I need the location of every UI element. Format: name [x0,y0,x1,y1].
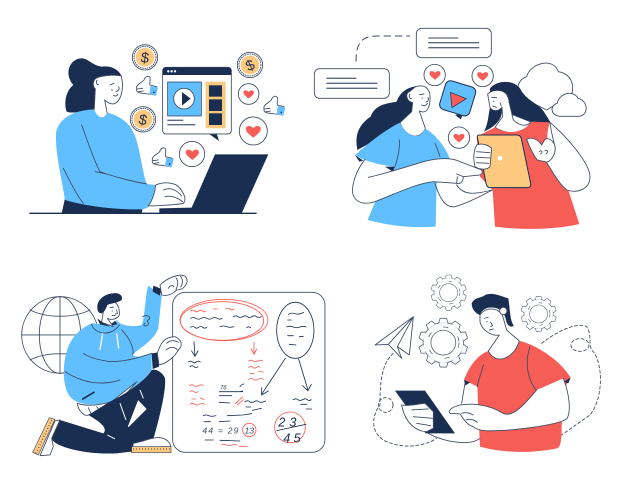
collar [97,318,117,327]
red text scribbles [189,360,263,405]
right woman hair [484,82,551,132]
far arm [462,383,465,403]
drawstrings [100,333,119,350]
icon: medium heart badge [179,141,205,167]
dark circled note [277,302,314,358]
icon: thumbs up three [152,148,174,167]
chat bubble left [314,69,389,98]
panel: man with tablet and gears [374,275,600,452]
right woman hand [527,138,555,162]
fraction circle [275,412,306,445]
upper hand [160,275,187,295]
icon: paper plane [375,317,413,358]
equation: 44 = 29 [202,425,240,435]
left woman t-shirt folds [395,140,440,167]
left woman lower arm [435,183,492,207]
small note with number: 76 [220,386,227,392]
red arrow [251,342,257,354]
hoodie drawstrings and folds [65,324,152,383]
trouser highlight [107,390,146,439]
sleeve cuffs [464,378,571,386]
icon: coin top left: $ [140,50,150,67]
left shoe [33,418,60,456]
right woman face [488,90,532,133]
equation result circle: 13 [244,425,254,435]
sweater fold lines [63,125,147,203]
sleeve squiggle [143,316,150,326]
panel: woman with laptop and video content [29,45,285,213]
globe [22,297,98,373]
icon: coin top left [132,45,158,70]
woman face and neck [93,75,122,118]
icon: thumbs up two [264,96,285,116]
cuff lower [152,352,159,369]
icon: large heart badge [239,117,267,145]
panel: man with whiteboard [22,275,325,456]
woman hair [65,58,122,113]
tablet camera dot [498,156,502,161]
trousers [52,370,165,454]
hand on tablet [402,403,433,432]
icon: small heart badge [238,84,259,104]
chat bubble top [416,28,491,58]
heart badge right [472,65,493,87]
typing hand [148,183,185,206]
head [102,300,119,327]
right woman dress [477,122,579,229]
hair [97,293,122,313]
icon: coin top right [237,52,263,78]
fraction circle: 45 [283,431,304,445]
face features [96,80,119,96]
icon: gear right [521,296,556,332]
icon: coin top right: $ [243,57,258,75]
trousers [62,198,143,213]
icon: coin middle [130,107,156,132]
t-shirt [464,341,571,452]
forearm line [428,433,480,443]
cuff upper [153,286,162,296]
ear [500,307,507,315]
clouds [518,63,586,116]
dark text scribbles [188,361,312,441]
dashed connector [356,36,410,62]
dashed path left [374,353,437,446]
left woman face and neck [400,86,430,136]
dashed path right [542,325,600,435]
face features [110,307,117,316]
heart badge bottom [448,127,470,148]
t-shirt folds [477,347,537,391]
icon: gear top [431,275,466,310]
hoodie pocket [83,392,94,399]
neck and face [480,309,519,359]
arrows [192,342,311,395]
icon: gear large [419,318,468,367]
dashed circle left [378,398,393,412]
fraction circle: 23 [277,416,300,430]
left woman sleeve shadows [355,155,395,172]
hair [472,294,514,327]
dashed circle right [571,339,589,351]
right woman face features [492,91,510,107]
play bubble [438,79,477,119]
right woman arm [545,122,590,191]
left woman hair [356,86,418,150]
left woman t-shirt [355,123,451,227]
red underline [222,444,247,446]
face features [484,317,493,330]
hem [77,382,137,415]
icon: coin middle: $ [137,112,148,129]
left woman face features [409,94,428,105]
right shoe [132,438,171,453]
ground line [29,211,257,215]
red circled note [180,299,268,341]
equation result circle [243,423,256,437]
whiteboard [173,292,325,452]
hand holding tablet [474,144,492,169]
icon: laptop [159,154,268,213]
video window [163,67,231,141]
heart badge left [424,64,445,86]
panel: two women with tablet [314,28,590,229]
tablet [395,391,455,433]
icon: thumbs up one [137,76,158,96]
hoodie [64,286,162,404]
lower hand [157,337,181,365]
pointing arm [449,378,569,431]
tablet [477,135,531,188]
sweater [56,109,156,209]
left woman pointing arm [353,158,482,203]
